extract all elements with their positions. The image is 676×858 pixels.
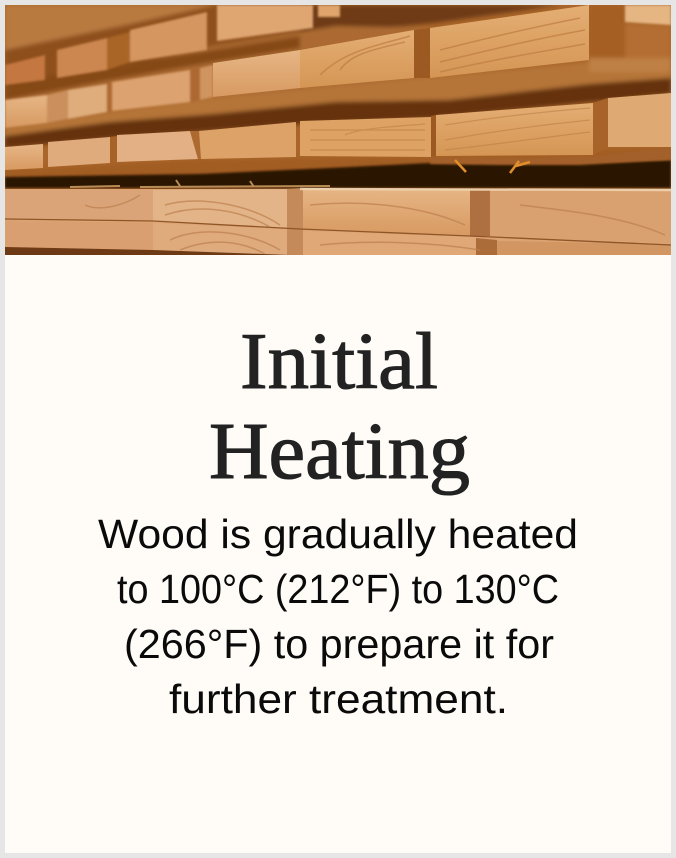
body line 2: to 100°C (212°F) to 130°C — [117, 566, 559, 612]
title — [209, 318, 470, 496]
body line 1: Wood is gradually heated — [98, 511, 578, 557]
row 2 board faces — [213, 5, 589, 97]
dark gap between board rows — [5, 147, 671, 188]
photo: stacked timber boards — [5, 5, 671, 255]
row 3 board faces — [5, 93, 671, 170]
body line 4: further treatment. — [169, 676, 508, 722]
body line 3: (266°F) to prepare it for — [124, 621, 554, 667]
row 1 board faces — [5, 5, 671, 128]
title line 1: Initial — [240, 318, 438, 406]
body text — [98, 511, 578, 722]
bottom stacked boards — [5, 188, 671, 255]
title line 2: Heating — [209, 408, 470, 496]
